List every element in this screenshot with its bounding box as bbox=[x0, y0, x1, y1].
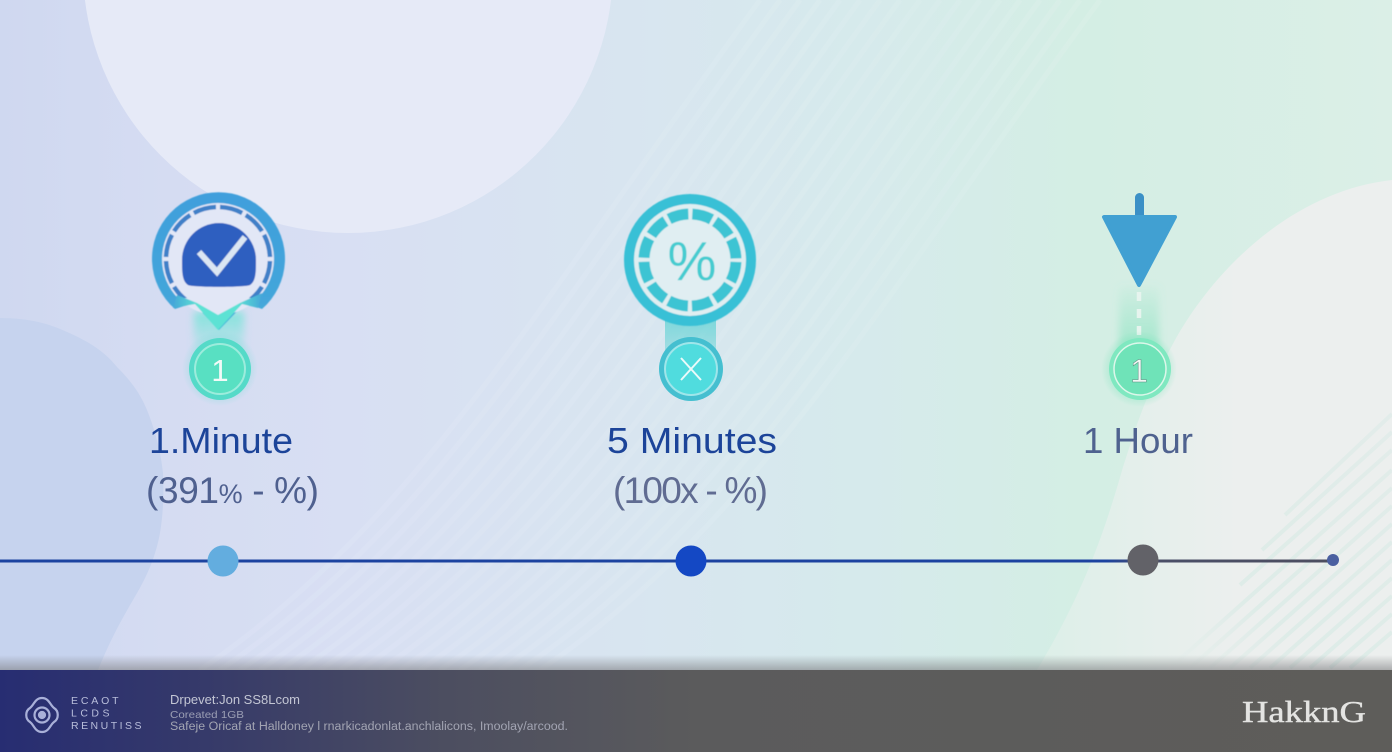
number badge 1: 1 bbox=[1130, 353, 1148, 389]
connector glow bbox=[194, 312, 244, 352]
label: 5 minutes: 5 Minutes bbox=[607, 420, 777, 461]
footer details text bbox=[170, 693, 568, 733]
number badge 1 bbox=[182, 330, 258, 406]
left blob bbox=[0, 318, 163, 670]
label: 1 minute bbox=[146, 420, 319, 511]
footer details text: Safeje Oricaf at Halldoney l rnarkicadonlat.anchlalicons, Imoolay/arcood. bbox=[170, 721, 568, 733]
icon: gauge ring bbox=[152, 192, 285, 330]
label: 1 minute: (391% - %) bbox=[146, 470, 319, 511]
top circle bbox=[83, 0, 613, 233]
timeline end dot bbox=[1327, 554, 1339, 566]
step 3: arrow down bbox=[1101, 193, 1177, 407]
icon: percent dial bbox=[624, 194, 756, 326]
timeline bbox=[0, 544, 1339, 576]
step 1: gauge icon with check bbox=[152, 192, 285, 406]
connector glow bbox=[665, 320, 716, 350]
footer wordmark: HakknG bbox=[1242, 694, 1366, 729]
icon: check mark bbox=[199, 237, 245, 272]
dashed line bbox=[1137, 292, 1141, 336]
footer details text: Drpevet:Jon SS8Lcom bbox=[170, 693, 300, 707]
label: 5 minutes bbox=[607, 420, 777, 511]
connector glow bbox=[1119, 286, 1159, 356]
icon: down arrow bbox=[1104, 193, 1175, 285]
icon: percent dial: % bbox=[668, 230, 716, 292]
timeline marker 1 bbox=[208, 546, 238, 576]
label: 1 minute: 1.Minute bbox=[149, 420, 293, 461]
right pale shape bbox=[1037, 180, 1392, 670]
number badge 1: 1 bbox=[211, 353, 229, 388]
footer logo icon bbox=[26, 698, 58, 732]
step 2: percent dial bbox=[624, 194, 756, 401]
footer brand text: RENUTISS bbox=[71, 720, 143, 732]
footer details text: Coreated 1GB bbox=[170, 709, 244, 721]
timeline marker 2 bbox=[676, 546, 706, 576]
footer brand text: ECAOT bbox=[71, 695, 120, 707]
footer brand text: LCDS bbox=[71, 708, 111, 720]
footer brand text bbox=[71, 695, 143, 732]
X badge bbox=[659, 337, 723, 401]
number badge 1 bbox=[1101, 331, 1177, 407]
label: 1 hour: 1 Hour bbox=[1083, 420, 1193, 461]
icon: blue badge bbox=[182, 223, 256, 287]
label: 5 minutes: (100x - %) bbox=[613, 470, 768, 511]
footer bbox=[0, 670, 1392, 752]
timeline marker 3 bbox=[1128, 544, 1158, 576]
